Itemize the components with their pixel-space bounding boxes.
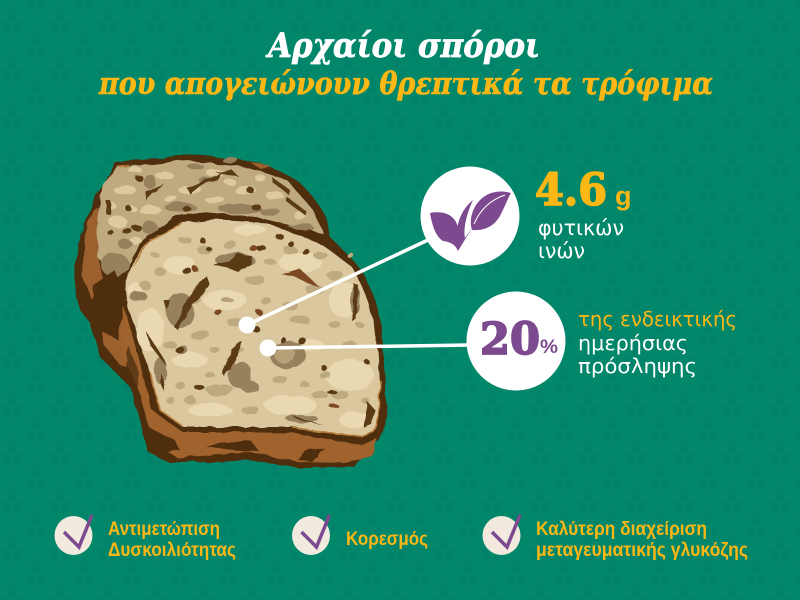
benefit: constipation <box>54 515 236 561</box>
title line 1: Αρχαίοι σπόροι <box>265 26 540 66</box>
title <box>98 26 713 102</box>
number 4.6: 4.6 <box>535 165 607 216</box>
benefit: constipation: Αντιμετώπιση <box>108 518 220 540</box>
benefit: constipation: Δυσκοιλιότητας <box>108 539 236 561</box>
bread silhouette <box>75 154 387 468</box>
badge: 20%: % <box>540 337 558 358</box>
connector: daily intake <box>268 345 470 348</box>
icon: leaf check <box>430 192 511 251</box>
front slice texture <box>128 224 375 428</box>
front slice crumb <box>125 220 380 437</box>
text: daily intake label: πρόσληψης <box>578 354 697 378</box>
text: daily intake label: της ενδεικτικής <box>578 307 737 331</box>
back slice crumb <box>97 160 323 277</box>
benefit: satiety: Κορεσμός <box>346 528 428 550</box>
text: daily intake label <box>578 307 737 378</box>
connector lines <box>238 240 470 356</box>
benefit: glucose management <box>482 515 748 561</box>
back slice texture <box>101 157 314 277</box>
underside shading <box>92 270 325 462</box>
front slice crust <box>123 212 387 448</box>
crust rim <box>133 224 380 437</box>
text: fibre label: φυτικών <box>538 216 624 240</box>
back crust highlights <box>82 162 270 370</box>
benefit: glucose management: Καλύτερη διαχείριση <box>536 518 707 540</box>
illustration: bread slices <box>75 154 387 468</box>
benefit: glucose management: μεταγευματικής γλυκόζης <box>536 539 748 561</box>
badge: 20%: 20 <box>480 314 540 365</box>
text: fibre label: ινών <box>538 239 585 263</box>
front crust underside <box>122 300 382 463</box>
text: fibre label <box>538 216 624 263</box>
connector: fibre <box>247 240 428 325</box>
badge: 20% <box>466 292 566 390</box>
title line 2: που απογειώνουν θρεπτικά τα τρόφιμα <box>98 66 713 102</box>
text: daily intake label: ημερήσιας <box>578 331 688 355</box>
stat: 4.6 g <box>535 165 632 216</box>
benefit: satiety <box>292 515 428 555</box>
icon: leaf badge <box>420 166 520 266</box>
unit g: g <box>615 181 632 211</box>
